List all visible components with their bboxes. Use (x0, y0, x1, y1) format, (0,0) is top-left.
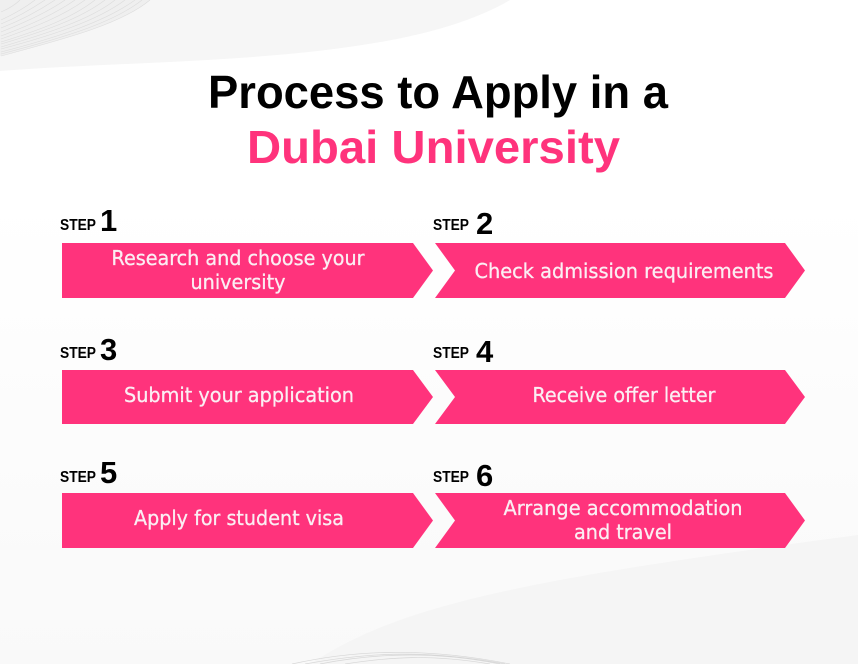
step 6: 6 (476, 458, 493, 493)
step 2: Check admission requirements (474, 259, 774, 283)
title: Dubai University (247, 121, 620, 173)
step 1: STEP (60, 217, 96, 234)
step 6 (433, 458, 805, 548)
step 6: and travel (574, 520, 672, 544)
step 3: STEP (60, 345, 96, 362)
step 4: Receive offer letter (532, 383, 716, 407)
step 3 (60, 332, 433, 424)
step 2 (433, 206, 805, 298)
step 5: 5 (100, 455, 117, 490)
step 3: Submit your application (124, 383, 354, 407)
step 5: STEP (60, 469, 96, 486)
step 1: Research and choose your (112, 246, 365, 270)
step 2: STEP (433, 217, 469, 234)
step 1: 1 (100, 203, 117, 238)
decorative bottom swoosh (292, 535, 858, 664)
step 4: 4 (476, 334, 494, 369)
title: Process to Apply in a (208, 66, 668, 118)
step 1 (60, 203, 433, 298)
step 5 (60, 455, 433, 548)
step 5: Apply for student visa (134, 506, 344, 530)
step 3: 3 (100, 332, 117, 367)
title (208, 66, 668, 173)
step 6: STEP (433, 469, 469, 486)
step 4 (433, 334, 805, 424)
decorative top swoosh (0, 0, 510, 71)
step 2: 2 (476, 206, 493, 241)
step 1: university (190, 270, 286, 294)
step 4: STEP (433, 345, 469, 362)
step 6: Arrange accommodation (504, 496, 742, 520)
